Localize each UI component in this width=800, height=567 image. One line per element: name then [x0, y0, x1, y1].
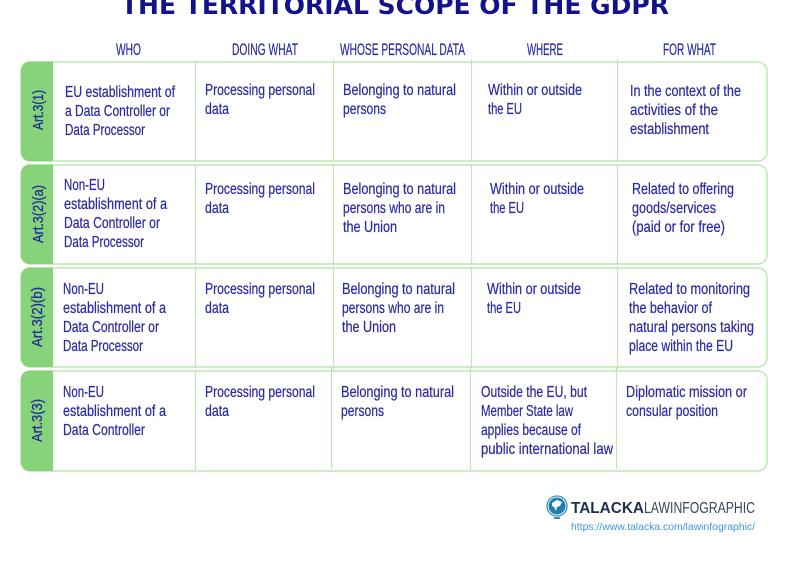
- row text cells: Processing personal: [205, 281, 315, 298]
- row label: Art.3(1): [30, 90, 47, 130]
- row: Art.3(1): [21, 59, 767, 161]
- column headers: WHERE: [527, 41, 563, 59]
- row text cells: EU establishment of: [65, 84, 176, 101]
- row text cells: Related to offering: [632, 181, 734, 198]
- row text cells: goods/services: [632, 200, 716, 217]
- logo url: https://www.talacka.com/lawinfographic/: [571, 521, 755, 533]
- row text cells: the behavior of: [629, 300, 713, 317]
- column headers: WHO: [116, 41, 141, 59]
- row text cells: Belonging to natural: [341, 384, 454, 401]
- row text cells: Belonging to natural: [343, 181, 456, 198]
- row text cells: [64, 177, 734, 251]
- row text cells: the Union: [343, 219, 397, 236]
- logo: Talacka Lawinfographic: [547, 496, 755, 533]
- column headers: DOING WHAT: [232, 41, 298, 59]
- row text cells: data: [205, 403, 229, 420]
- column headers: [116, 41, 716, 59]
- row text cells: data: [205, 300, 229, 317]
- row text cells: Data Controller or: [64, 215, 160, 232]
- row text cells: the EU: [487, 300, 521, 317]
- row text cells: Processing personal: [205, 181, 315, 198]
- row text cells: [63, 281, 754, 355]
- column headers: WHOSE PERSONAL DATA: [340, 41, 465, 59]
- row text cells: establishment of a: [64, 196, 167, 213]
- row text cells: persons: [343, 101, 386, 118]
- row text cells: Data Processor: [65, 122, 145, 139]
- row text cells: Data Processor: [64, 234, 144, 251]
- row text cells: (paid or for free): [632, 219, 725, 236]
- row text cells: Data Processor: [63, 338, 143, 355]
- logo: Talacka Lawinfographic: LAWINFOGRAPHIC: [644, 500, 755, 517]
- row text cells: data: [205, 200, 229, 217]
- row text cells: Non-EU: [63, 281, 104, 298]
- row text cells: the EU: [490, 200, 524, 217]
- row text cells: persons who are in: [343, 200, 445, 217]
- row text cells: natural persons taking: [629, 319, 754, 336]
- row text cells: establishment of a: [63, 403, 166, 420]
- row text cells: Non-EU: [64, 177, 105, 194]
- row text cells: Belonging to natural: [342, 281, 455, 298]
- row label: Art.3(3): [29, 399, 46, 442]
- row text cells: Processing personal: [205, 82, 315, 99]
- row: Art.3(2)(a): [21, 164, 767, 266]
- row text cells: Diplomatic mission or: [626, 384, 747, 401]
- row text cells: Member State law: [481, 403, 574, 420]
- row text cells: public international law: [481, 441, 614, 458]
- row text cells: Within or outside: [487, 281, 581, 298]
- logo wordmark: TALACKA: [571, 500, 644, 517]
- row text cells: the EU: [488, 101, 522, 118]
- row text cells: Within or outside: [488, 82, 582, 99]
- row label: Art.3(2)(a): [30, 185, 47, 243]
- icon: globe: [547, 496, 567, 518]
- row text cells: Related to monitoring: [629, 281, 750, 298]
- row text cells: a Data Controller or: [65, 103, 170, 120]
- row text cells: persons who are in: [342, 300, 444, 317]
- row text cells: Outside the EU, but: [481, 384, 588, 401]
- row text cells: applies because of: [481, 422, 582, 439]
- row text cells: place within the EU: [629, 338, 733, 355]
- row text cells: the Union: [342, 319, 396, 336]
- row text cells: Non-EU: [63, 384, 104, 401]
- row text cells: [65, 82, 741, 139]
- row text cells: activities of the: [630, 102, 718, 119]
- row text cells: establishment of a: [63, 300, 166, 317]
- row text cells: Data Controller or: [63, 319, 159, 336]
- row text cells: Processing personal: [205, 384, 315, 401]
- row text cells: data: [205, 101, 229, 118]
- row text cells: In the context of the: [630, 83, 741, 100]
- row text cells: Data Controller: [63, 422, 145, 439]
- row: Art.3(3): [21, 367, 767, 471]
- row text cells: [63, 384, 747, 458]
- row text cells: consular position: [626, 403, 718, 420]
- row text cells: Within or outside: [490, 181, 584, 198]
- row text cells: establishment: [630, 121, 710, 138]
- row label: Art.3(2)(b): [29, 287, 46, 347]
- row: Art.3(2)(b): [21, 267, 767, 370]
- row text cells: Belonging to natural: [343, 82, 456, 99]
- column headers: FOR WHAT: [663, 41, 716, 59]
- row text cells: persons: [341, 403, 384, 420]
